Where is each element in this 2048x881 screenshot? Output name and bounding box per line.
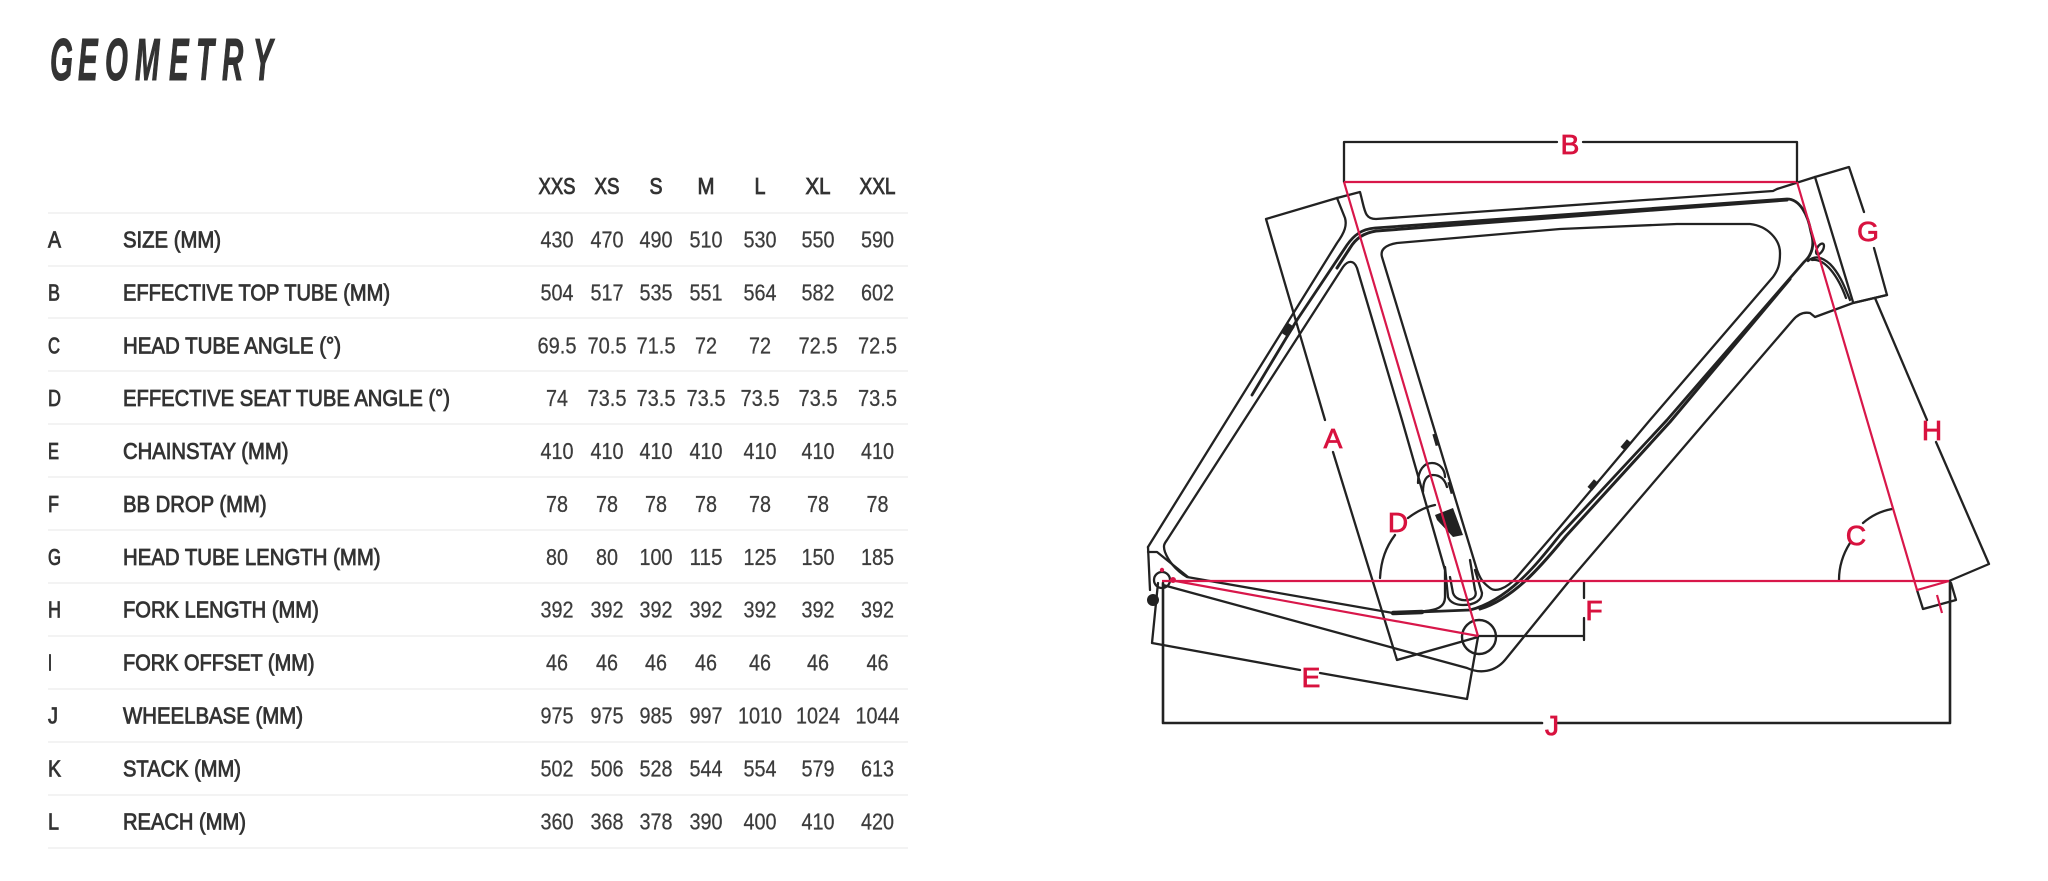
chainstay thick section (1393, 612, 1422, 613)
row D: effective seat tube angle: 73.5 (740, 385, 780, 411)
row C: head tube angle: 72.5 (798, 332, 838, 358)
row H: fork length: 392 (640, 597, 672, 623)
row D: effective seat tube angle: D (48, 385, 61, 411)
dimension letters: G (1857, 216, 1879, 247)
seat tube cable ports (1418, 463, 1482, 605)
row G: head tube length: HEAD TUBE LENGTH (MM) (123, 544, 381, 570)
table header: sizes: S (650, 173, 662, 199)
row L: reach: 378 (640, 808, 672, 834)
row B: effective top tube: 504 (540, 279, 574, 305)
row F: BB drop: F (48, 491, 59, 517)
row J: wheelbase: J (48, 702, 58, 728)
row J: wheelbase: 975 (540, 702, 574, 728)
row H: fork length: 392 (540, 597, 574, 623)
row D: effective seat tube angle: 73.5 (858, 385, 897, 411)
row E: chainstay: 410 (590, 438, 624, 464)
row C: head tube angle (48, 332, 897, 358)
row I: fork offset (48, 650, 888, 676)
geometry table (48, 173, 908, 848)
row A: size: 430 (540, 226, 574, 252)
row A: size: 530 (744, 226, 776, 252)
dropout (1148, 547, 1188, 590)
row C: head tube angle: 69.5 (538, 332, 576, 358)
row K: stack: STACK (MM) (123, 755, 241, 781)
row H: fork length: 392 (861, 597, 894, 623)
row L: reach: 400 (744, 808, 776, 834)
frame outline (1148, 177, 1887, 671)
row K: stack: 506 (590, 755, 624, 781)
row G: head tube length: 125 (744, 544, 776, 570)
row I: fork offset: 46 (749, 650, 771, 676)
row G: head tube length: 80 (546, 544, 568, 570)
row E: chainstay (48, 438, 894, 464)
dimension letters: D (1388, 507, 1408, 538)
row I: fork offset: I (48, 650, 52, 676)
row B: effective top tube: 517 (590, 279, 624, 305)
dimension B bracket (1344, 142, 1797, 182)
row J: wheelbase (48, 702, 900, 728)
row E: chainstay: 410 (744, 438, 776, 464)
red reference lines (1162, 182, 1949, 636)
row A: size (48, 226, 894, 252)
row A: size: SIZE (MM) (123, 226, 221, 252)
row C: head tube angle: HEAD TUBE ANGLE (°) (123, 332, 341, 358)
angle arc C (1839, 509, 1892, 580)
row G: head tube length: 150 (802, 544, 834, 570)
row L: reach: 390 (690, 808, 722, 834)
row H: fork length (48, 597, 894, 623)
row D: effective seat tube angle: EFFECTIVE SEAT TUBE ANGLE (°) (123, 385, 450, 411)
bottom bracket circle (1462, 620, 1496, 654)
row L: reach: 410 (802, 808, 834, 834)
row B: effective top tube (48, 279, 894, 305)
row A: size: A (48, 226, 62, 252)
row F: BB drop: 78 (596, 491, 618, 517)
row F: BB drop: 78 (695, 491, 717, 517)
main triangle inner edge (1382, 224, 1780, 590)
dimension letters: F (1585, 595, 1603, 626)
row I: fork offset: 46 (866, 650, 888, 676)
row L: reach: L (48, 808, 59, 834)
row B: effective top tube: 535 (640, 279, 672, 305)
seat stay outer edge (1148, 198, 1346, 547)
row G: head tube length: G (48, 544, 61, 570)
dimension G bracket (1815, 167, 1887, 303)
row H: fork length: 392 (744, 597, 776, 623)
row G: head tube length: 80 (596, 544, 618, 570)
row J: wheelbase: 985 (640, 702, 672, 728)
table header: sizes: M (698, 173, 714, 199)
row F: BB drop (48, 491, 888, 517)
row H: fork length: FORK LENGTH (MM) (123, 597, 319, 623)
row J: wheelbase: 1010 (738, 702, 782, 728)
row H: fork length: 392 (590, 597, 624, 623)
row G: head tube length: 100 (640, 544, 672, 570)
row B: effective top tube: 582 (802, 279, 834, 305)
row C: head tube angle: 72 (695, 332, 717, 358)
table header: sizes: XXL (860, 173, 896, 199)
row D: effective seat tube angle: 74 (546, 385, 568, 411)
row K: stack: 502 (540, 755, 574, 781)
row C: head tube angle: 72 (749, 332, 771, 358)
red pivot dots (1160, 568, 1176, 583)
row A: size: 490 (640, 226, 672, 252)
row C: head tube angle: C (48, 332, 60, 358)
row L: reach: 360 (540, 808, 574, 834)
dimension letters: A (1324, 423, 1343, 454)
row E: chainstay: 410 (640, 438, 672, 464)
row F: BB drop: 78 (749, 491, 771, 517)
row D: effective seat tube angle: 73.5 (588, 385, 626, 411)
top tube centre double line (1337, 200, 1790, 609)
dimension letters: C (1846, 520, 1866, 551)
top tube upper edge and seat cluster (1337, 177, 1815, 219)
row F: BB drop: 78 (546, 491, 568, 517)
dimension F bracket (1478, 582, 1584, 640)
row D: effective seat tube angle: 73.5 (686, 385, 726, 411)
dimension letters: B (1561, 129, 1579, 160)
dimension letters (1302, 129, 1942, 741)
row A: size: 470 (590, 226, 624, 252)
row B: effective top tube: EFFECTIVE TOP TUBE (MM) (123, 279, 390, 305)
frame details (1147, 323, 1632, 606)
row L: reach: 420 (861, 808, 894, 834)
row A: size: 550 (802, 226, 834, 252)
row C: head tube angle: 71.5 (636, 332, 676, 358)
row F: BB drop: 78 (866, 491, 888, 517)
row D: effective seat tube angle: 73.5 (798, 385, 838, 411)
row C: head tube angle: 72.5 (858, 332, 897, 358)
brake hose at head tube (1808, 257, 1850, 300)
row B: effective top tube: 551 (690, 279, 722, 305)
row F: BB drop: 78 (645, 491, 667, 517)
row E: chainstay: 410 (540, 438, 574, 464)
row K: stack: K (48, 755, 62, 781)
row H: fork length: 392 (802, 597, 834, 623)
table header: sizes: XL (806, 173, 831, 199)
row E: chainstay: 410 (690, 438, 722, 464)
row E: chainstay: 410 (861, 438, 894, 464)
dimension letters: H (1922, 415, 1942, 446)
row D: effective seat tube angle: 73.5 (636, 385, 676, 411)
angle arc D (1380, 505, 1435, 578)
top tube and down tube centre line (1252, 199, 1813, 613)
rear triangle inner edge (1164, 262, 1445, 613)
row L: reach: REACH (MM) (123, 808, 246, 834)
row I: fork offset: 46 (695, 650, 717, 676)
row J: wheelbase: 975 (590, 702, 624, 728)
dimension I bracket (1917, 583, 1956, 609)
dimension J bracket (1163, 581, 1950, 723)
row L: reach (48, 808, 894, 834)
row B: effective top tube: B (48, 279, 60, 305)
table header: sizes: XS (594, 173, 620, 199)
row A: size: 510 (690, 226, 722, 252)
row J: wheelbase: WHEELBASE (MM) (123, 702, 303, 728)
row K: stack: 579 (802, 755, 834, 781)
chainstay lower edge and down tube lower edge (1163, 295, 1887, 671)
row K: stack: 544 (690, 755, 723, 781)
row B: effective top tube: 564 (744, 279, 777, 305)
row F: BB drop: 78 (807, 491, 829, 517)
dimension lines (1152, 142, 1989, 723)
row D: effective seat tube angle (48, 385, 897, 411)
row E: chainstay: E (48, 438, 59, 464)
row A: size: 590 (861, 226, 894, 252)
table header: sizes: XXS (538, 173, 576, 199)
row K: stack: 613 (861, 755, 894, 781)
row I: fork offset: 46 (645, 650, 667, 676)
row J: wheelbase: 1024 (796, 702, 840, 728)
row I: fork offset: 46 (546, 650, 568, 676)
row K: stack: 528 (640, 755, 672, 781)
dimension E bracket (1152, 583, 1478, 699)
row H: fork length: H (48, 597, 61, 623)
row K: stack: 554 (744, 755, 777, 781)
dimension letters: E (1302, 662, 1320, 693)
dimension A bracket (1266, 198, 1478, 660)
head tube front edge (1815, 177, 1853, 302)
row J: wheelbase: 1044 (856, 702, 900, 728)
row E: chainstay: 410 (802, 438, 834, 464)
dimension letters: J (1545, 710, 1559, 741)
row I: fork offset: FORK OFFSET (MM) (123, 650, 314, 676)
row I: fork offset: 46 (596, 650, 618, 676)
row B: effective top tube: 602 (861, 279, 894, 305)
row G: head tube length: 185 (861, 544, 894, 570)
row G: head tube length: 115 (690, 544, 722, 570)
row G: head tube length (48, 544, 894, 570)
row L: reach: 368 (590, 808, 624, 834)
table header: sizes: L (754, 173, 766, 199)
row F: BB drop: BB DROP (MM) (123, 491, 267, 517)
title: GEOMETRY (50, 27, 275, 93)
row I: fork offset: 46 (807, 650, 829, 676)
table header: sizes (538, 173, 896, 199)
row E: chainstay: CHAINSTAY (MM) (123, 438, 288, 464)
dimension H bracket (1875, 298, 1989, 581)
row H: fork length: 392 (690, 597, 722, 623)
bike frame geometry diagram (1147, 129, 1989, 741)
row K: stack (48, 755, 894, 781)
row J: wheelbase: 997 (690, 702, 722, 728)
row C: head tube angle: 70.5 (588, 332, 626, 358)
